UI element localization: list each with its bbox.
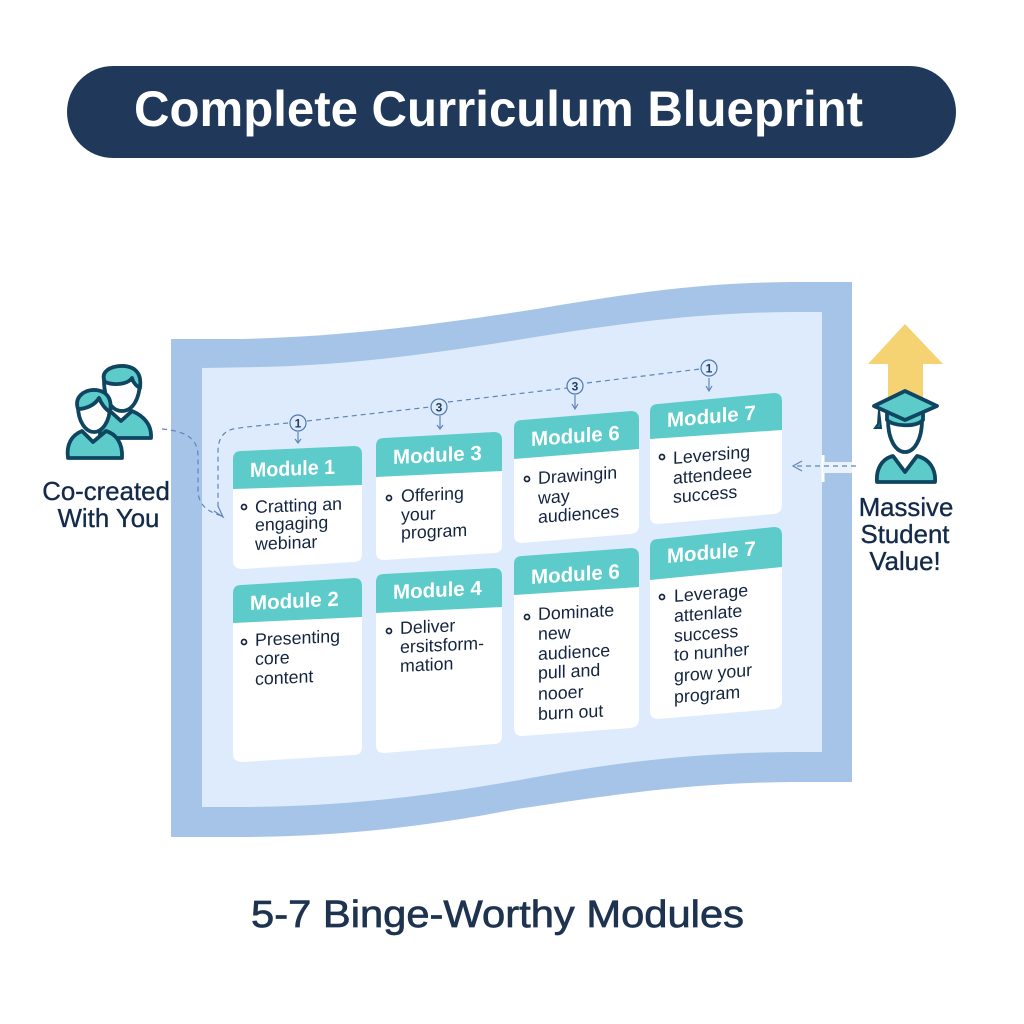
step marker 3 (431, 399, 447, 415)
label: massive student value: Student (861, 521, 949, 549)
label: co-created with you: Co-created (42, 478, 170, 506)
step marker 1 (701, 360, 717, 376)
icon: co-creators (68, 366, 151, 458)
module card 7 second row: to nunher (674, 639, 749, 665)
front person (68, 390, 122, 458)
module card 2: content (255, 666, 313, 689)
panel: curriculum sheet (171, 282, 852, 837)
module card 3: Module 3 (393, 442, 482, 469)
icon: graduate student (874, 391, 937, 482)
connector: student to sheet (793, 455, 858, 482)
module card 4: mation (400, 653, 453, 676)
face (888, 420, 922, 452)
module card 7 second row: Module 7 (667, 537, 756, 568)
module card 7: Leversing (673, 442, 750, 468)
title banner: Complete Curriculum Blueprint (134, 81, 863, 137)
arrow: student value up (868, 324, 943, 400)
module card 6 second row: pull and (538, 660, 600, 683)
step marker 3 (567, 378, 583, 394)
module card 3: your (401, 503, 436, 525)
module card 4 (376, 568, 502, 753)
module card 7 (650, 393, 782, 524)
flow connector: numbered dashed path (162, 360, 717, 517)
module card 3 (376, 432, 502, 560)
module card 1: engaging (255, 512, 328, 535)
module card 6 second row: nooer (538, 682, 584, 704)
step marker 1: 1 (706, 362, 713, 376)
back person (100, 366, 151, 438)
module card 1: webinar (254, 532, 317, 554)
module card 6 second row (514, 548, 639, 736)
step marker 1 (290, 415, 306, 431)
module card 7: Module 7 (667, 402, 756, 432)
module card 1: Module 1 (250, 456, 335, 482)
module card 6 second row: audience (538, 640, 610, 664)
shoulders (877, 456, 935, 482)
module card 4: Module 4 (393, 577, 482, 604)
module card 6: audiences (538, 501, 619, 527)
module card 7 second row: attenlate (674, 601, 742, 626)
module card 2: core (255, 647, 290, 669)
module card 3: program (401, 520, 467, 543)
label: massive student value: Massive (859, 494, 953, 522)
mortarboard (874, 391, 937, 420)
module card 4: ersitsform- (400, 633, 484, 657)
module card 6: Module 6 (531, 422, 620, 451)
module card 7 second row: program (674, 682, 740, 707)
caption: 5-7 binge-worthy modules: 5-7 Binge-Worthy Modules (251, 894, 744, 936)
module card 1 (233, 446, 362, 569)
module card 6 second row: burn out (538, 701, 603, 724)
module card 6: way (537, 486, 570, 508)
module card 6 second row: Module 6 (531, 560, 620, 589)
module card 7: success (673, 482, 737, 507)
module card 6 second row: Dominate (538, 600, 614, 624)
step marker 1: 1 (295, 416, 302, 430)
label: co-created with you: With You (58, 505, 159, 533)
step marker 3: 3 (436, 400, 443, 414)
module card 2: Presenting (255, 626, 340, 650)
module card 7 second row (650, 527, 782, 719)
step marker 3: 3 (572, 380, 579, 394)
module card 7 second row: grow your (674, 660, 752, 686)
module card 4: Deliver (400, 615, 455, 638)
module card 2: Module 2 (250, 588, 339, 615)
tassel (875, 410, 881, 428)
label: massive student value: Value! (869, 548, 941, 576)
module card 2 (233, 578, 362, 762)
module card 7 second row: Leverage (674, 580, 748, 606)
module card 6: Drawingin (538, 462, 617, 488)
module card 7: attendeee (673, 461, 752, 488)
module card 6 second row: new (538, 622, 571, 644)
title banner (67, 66, 956, 158)
hair band under cap (887, 412, 923, 425)
module card 6 (514, 411, 639, 543)
module card 1: Cratting an (255, 494, 342, 517)
module card 3: Offering (401, 483, 464, 506)
module card 7 second row: success (674, 621, 738, 646)
